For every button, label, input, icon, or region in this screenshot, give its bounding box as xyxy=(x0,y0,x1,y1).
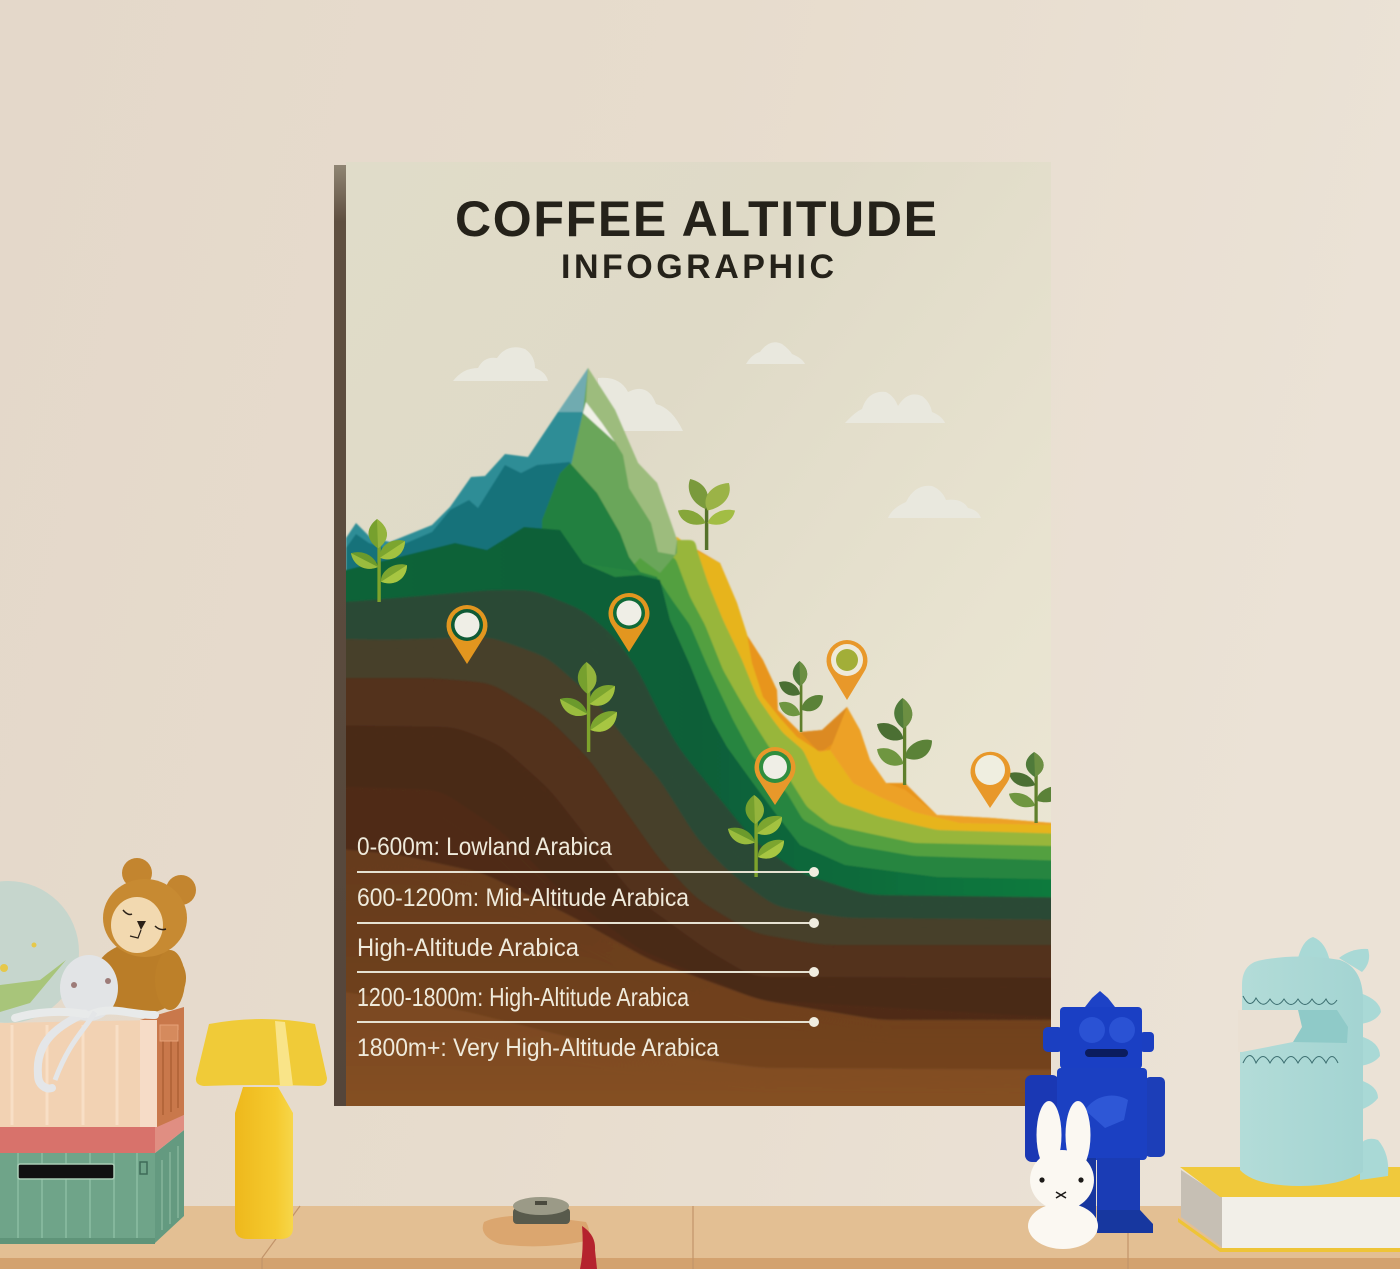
mint dinosaur xyxy=(1238,937,1388,1186)
legend row 3 xyxy=(357,934,819,977)
legend row 4 xyxy=(357,982,819,1027)
icon: sprout 6 xyxy=(1009,752,1051,823)
heading: coffee altitude: COFFEE ALTITUDE xyxy=(455,191,937,247)
mountain: snow patch xyxy=(583,402,615,442)
dino body xyxy=(1240,956,1363,1186)
shelf xyxy=(0,1206,1400,1269)
globe xyxy=(0,881,79,1023)
sprouts xyxy=(351,479,1063,877)
band: dark brown xyxy=(346,727,1051,1016)
green crate xyxy=(0,1130,184,1244)
legend row 4: 1200-1800m: High-Altitude Arabica xyxy=(357,982,689,1012)
icon: pin 1 xyxy=(446,605,487,664)
icon: sprout 7 xyxy=(728,795,784,877)
legend row 3: High-Altitude Arabica xyxy=(357,934,579,962)
legend row 2: 600-1200m: Mid-Altitude Arabica xyxy=(357,884,689,912)
band: light orange xyxy=(820,708,1051,824)
landscape layers xyxy=(346,368,1051,1106)
legend row 2 xyxy=(357,884,819,928)
dino spikes xyxy=(1297,937,1388,1180)
mountain: snow cap teal xyxy=(558,368,588,412)
location pins xyxy=(446,593,1010,808)
poster xyxy=(300,162,1100,1160)
mountain: light green xyxy=(570,368,677,573)
orange facet xyxy=(801,708,846,750)
icon: pin 3 xyxy=(826,640,868,700)
legend row 1 xyxy=(357,833,819,877)
icon: pin 4 xyxy=(755,747,796,805)
title xyxy=(455,191,937,286)
band: green xyxy=(586,565,1051,880)
band: olive green xyxy=(346,589,1051,920)
legend: altitude list xyxy=(357,833,819,1062)
band: olive brown xyxy=(346,637,1051,946)
icon: sprout 2 xyxy=(678,479,735,550)
band: earth 1 xyxy=(300,785,1100,1160)
band: lime xyxy=(672,539,1051,847)
dino mouth opening xyxy=(1238,1010,1302,1052)
icon: pin 2 xyxy=(608,593,649,652)
plush bear xyxy=(94,858,196,1014)
icon: sprout 5 xyxy=(877,698,932,785)
crates stack xyxy=(0,1007,184,1244)
yellow lamp xyxy=(196,1019,327,1239)
icon: sprout 1 xyxy=(351,519,407,602)
band: dark green xyxy=(346,526,1051,898)
subheading: infographic: INFOGRAPHIC xyxy=(561,248,834,286)
legend row 5: 1800m+: Very High-Altitude Arabica xyxy=(357,1034,719,1062)
band: earth 2 xyxy=(346,849,1051,1070)
dino mouth interior xyxy=(1293,1010,1348,1043)
wooden toy xyxy=(483,1197,597,1269)
legend row 1: 0-600m: Lowland Arabica xyxy=(357,833,612,861)
band: brown xyxy=(346,678,1051,978)
band: mid green xyxy=(634,557,1051,862)
band: green upper xyxy=(541,462,657,578)
icon: sprout 3 xyxy=(560,662,617,752)
band: orange xyxy=(696,549,1050,824)
mountain: dark teal xyxy=(346,462,570,570)
icon: pin 5 xyxy=(971,752,1010,808)
band: earth 3 xyxy=(346,992,1051,1106)
poster side edge xyxy=(334,165,346,1106)
yellow book xyxy=(1178,1167,1400,1252)
salmon band xyxy=(0,1115,184,1153)
clouds xyxy=(453,342,981,518)
band: yellow xyxy=(676,536,1051,834)
icon: sprout 4 xyxy=(779,661,823,732)
knitted octopus xyxy=(15,955,155,1088)
mountain: pale ridge xyxy=(586,368,677,555)
dino teeth xyxy=(1243,996,1338,1063)
mountain: teal xyxy=(346,411,584,548)
blue robot xyxy=(1025,991,1165,1233)
white bunny xyxy=(1028,1101,1098,1249)
peach crate xyxy=(0,1007,184,1127)
